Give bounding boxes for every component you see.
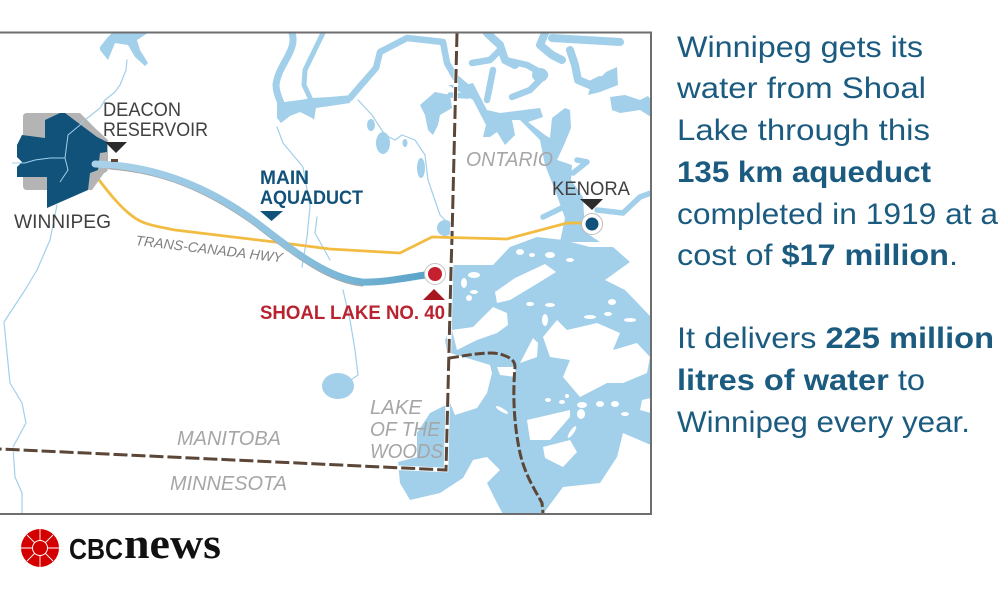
label: Manitoba: MANITOBA [177,428,281,450]
marker: Kenora: KENORA [552,179,630,200]
text block: description: 135 km aqueduct [677,156,931,189]
text block: description: Winnipeg gets its [677,31,923,64]
icon: CBC gem [21,529,59,567]
label: Trans-Canada Hwy: TRANS-CANADA HWY [135,232,285,266]
text block: description: water from Shoal [676,72,926,105]
Winnipeg city shape [12,113,108,208]
wordmark: news [124,521,221,568]
text block: description: Winnipeg every year. [677,406,970,439]
marker: Kenora [552,179,630,234]
wordmark: CBC [69,534,123,566]
text block: description: litres of water to [677,364,925,397]
label: Main Aquaduct: MAIN [260,168,309,189]
label: Minnesota: MINNESOTA [170,473,287,495]
label: Main Aquaduct [260,168,363,221]
state border: Manitoba-Ontario-Minnesota [0,33,543,513]
highway [93,172,582,253]
marker: Shoal Lake No. 40: SHOAL LAKE NO. 40 [260,303,445,324]
map frame [0,32,651,514]
text block: description [676,31,998,439]
label: Lake of the Woods: LAKE [370,397,423,419]
label: Deacon Reservoir: RESERVOIR [103,120,208,141]
water bodies [4,33,651,514]
label: Deacon Reservoir: DEACON [103,100,181,121]
marker: Shoal Lake No. 40 [260,264,446,324]
text block: description: cost of $17 million . [677,239,958,272]
label: Main Aquaduct: AQUADUCT [260,188,363,209]
islands [452,307,508,350]
text block: description: It delivers 225 million [677,322,994,355]
CBC News logo [21,521,221,568]
label: Ontario: ONTARIO [466,149,553,171]
label: Lake of the Woods: OF THE [370,419,441,441]
text block: description: Lake through this [677,114,930,147]
label: Lake of the Woods: WOODS [370,441,444,463]
label: Lake of the Woods [370,397,444,463]
label: Deacon Reservoir [103,100,208,162]
text block: description: completed in 1919 at a [677,198,998,231]
aqueduct line [95,164,425,284]
wordmark [69,521,221,568]
map panel [0,32,651,514]
label: Winnipeg: WINNIPEG [14,212,111,233]
